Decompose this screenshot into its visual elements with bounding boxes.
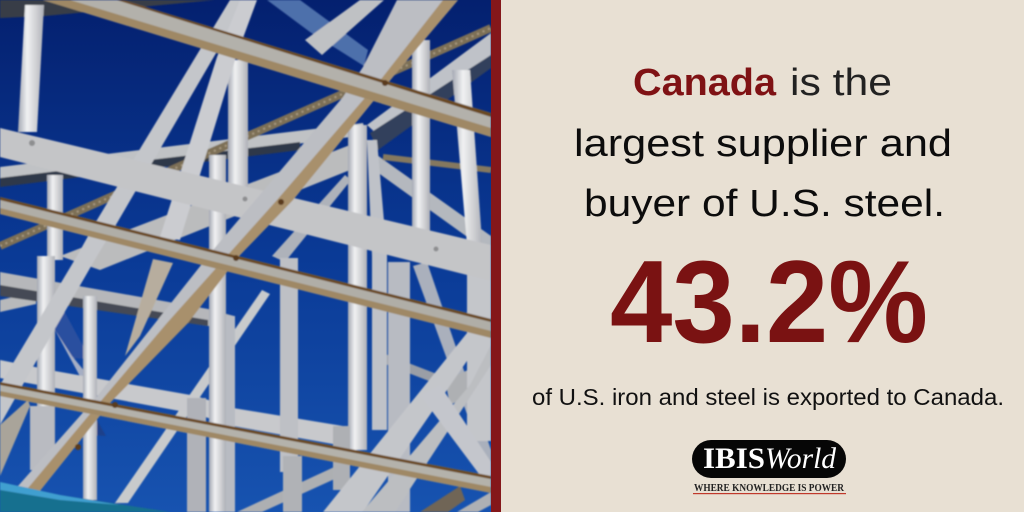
heading line 1: is the xyxy=(790,62,892,104)
beam: lower with brown edge xyxy=(0,382,491,493)
photo: steel frame against blue sky xyxy=(0,0,491,512)
perforated rods xyxy=(0,28,491,246)
logo: IBISWorld: WHERE KNOWLEDGE IS POWER xyxy=(694,483,845,494)
lower right diagonal braces xyxy=(322,332,491,512)
back horizontal members xyxy=(0,0,491,448)
panel: text content xyxy=(532,62,1004,410)
red divider bar xyxy=(491,0,501,512)
logo: IBISWorld: IBIS xyxy=(703,442,765,475)
light horizontal beam xyxy=(0,128,491,281)
diagonal braces, upper left xyxy=(0,0,257,476)
big statistic: 43.2% xyxy=(610,236,928,367)
heading line 2: largest supplier and xyxy=(574,123,952,165)
beam: top with brown edge xyxy=(43,0,491,137)
logo: IBISWorld xyxy=(692,440,846,494)
heading line 1: Canada xyxy=(633,62,777,104)
teal roof edge xyxy=(0,482,170,512)
vertical studs xyxy=(18,5,491,512)
back diagonal members xyxy=(0,0,491,512)
main diagonal brace xyxy=(0,0,458,512)
statistic caption: of U.S. iron and steel is exported to Canada. xyxy=(532,384,1004,410)
beam: middle with brown edge xyxy=(0,197,491,338)
heading line 3: buyer of U.S. steel. xyxy=(584,183,945,225)
logo: IBISWorld: World xyxy=(765,442,837,475)
